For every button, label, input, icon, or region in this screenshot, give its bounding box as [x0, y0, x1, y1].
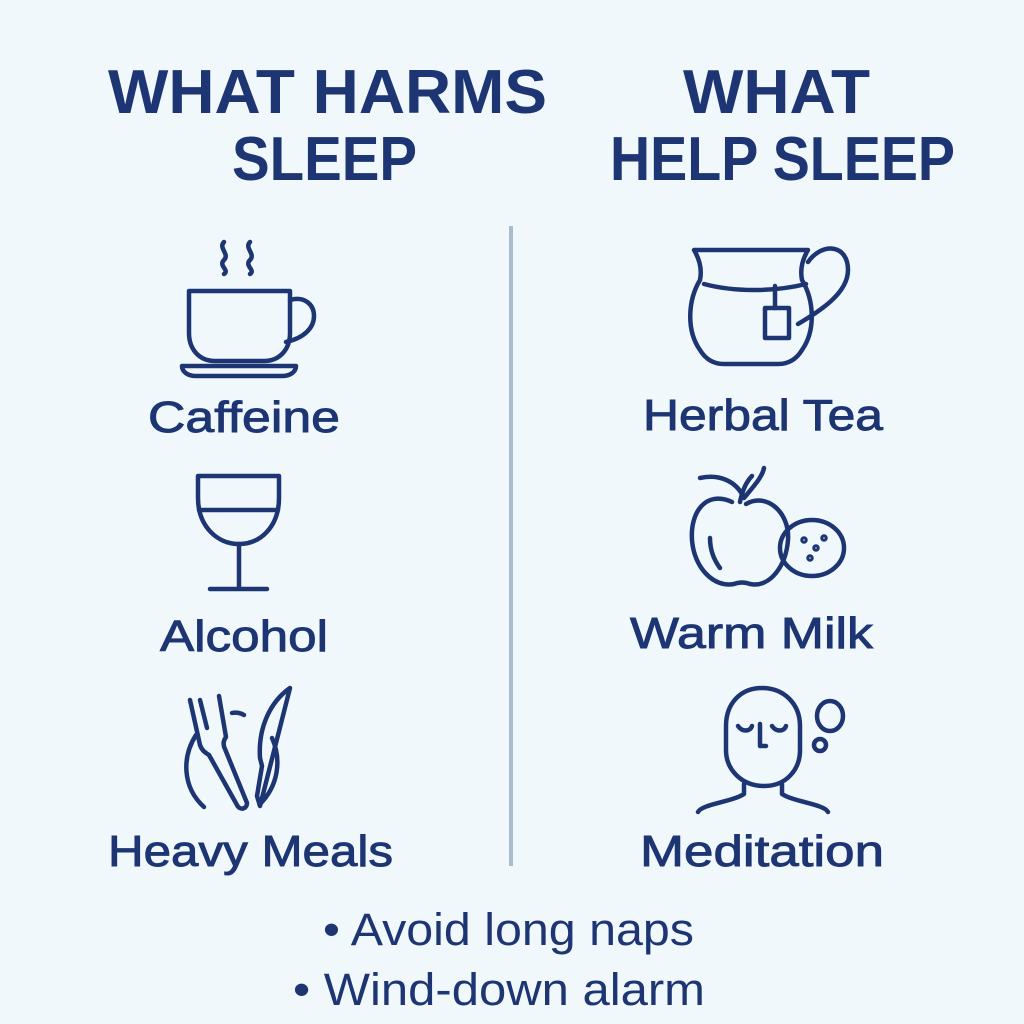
icon: fork and knife [186, 688, 290, 809]
bullet list [293, 904, 705, 1015]
title: what harms sleep [108, 58, 547, 194]
label: alcohol: Alcohol [160, 612, 328, 661]
icon: herbal tea jug [690, 249, 848, 364]
bullet list: • Wind-down alarm [293, 964, 705, 1015]
icon: meditation head [698, 688, 843, 812]
label: caffeine: Caffeine [148, 393, 340, 442]
label: warm milk: Warm Milk [630, 609, 874, 658]
title: what harms sleep: SLEEP [232, 125, 417, 194]
title: what help sleep [610, 58, 955, 194]
bullet list: • Avoid long naps [323, 904, 694, 955]
label: herbal tea: Herbal Tea [643, 391, 884, 440]
label: meditation: Meditation [640, 827, 884, 876]
title: what harms sleep: WHAT HARMS [108, 58, 547, 127]
title: what help sleep: WHAT [683, 58, 870, 127]
title: what help sleep: HELP SLEEP [610, 125, 955, 194]
icon: coffee cup [182, 242, 314, 376]
icon: wine glass [198, 476, 279, 589]
icon: apple and egg [692, 468, 844, 585]
label: heavy meals: Heavy Meals [108, 827, 393, 876]
